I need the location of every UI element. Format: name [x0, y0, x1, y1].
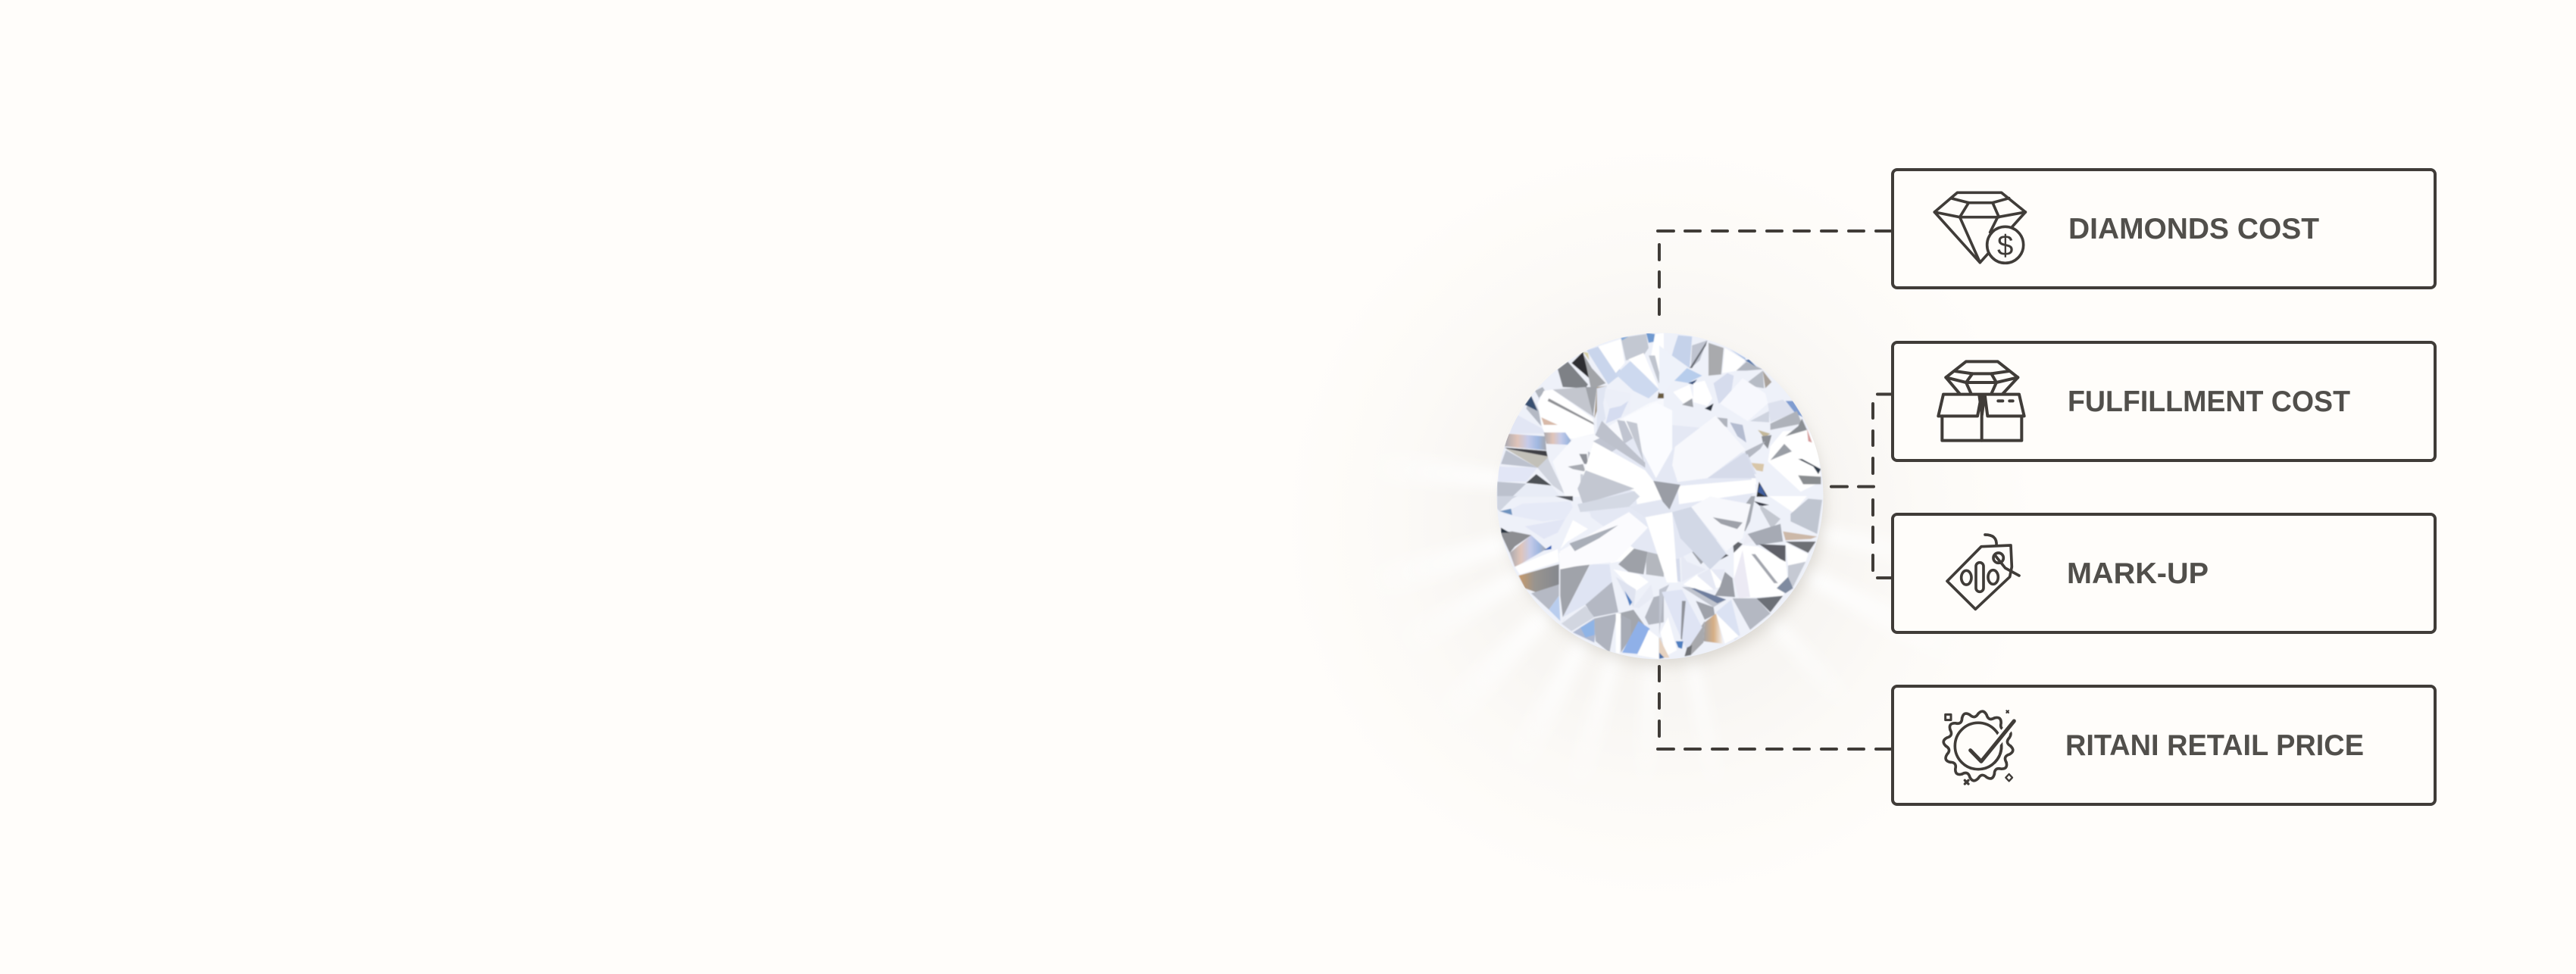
icon: diamond with dollar coin: [1934, 192, 2025, 263]
facets: top left quadrant: [1497, 332, 1664, 497]
icon: diamond with dollar coin: $: [1997, 229, 2013, 262]
facets: bottom right quadrant: [1659, 496, 1822, 659]
icon: quality badge with check mark: [1940, 708, 2016, 784]
connector: ritani retail price: [1658, 667, 1893, 749]
icon: price tag: [1947, 535, 2019, 609]
facets: central table star: [1560, 403, 1756, 582]
diamond: [1493, 326, 1830, 667]
diamond glow and light rays: [1281, 144, 2039, 901]
label: mark-up: MARK-UP: [2067, 557, 2209, 590]
label: diamonds cost: DIAMONDS COST: [2068, 213, 2319, 245]
label: fulfillment cost: FULFILLMENT COST: [2068, 386, 2350, 418]
facets: bottom left quadrant: [1497, 496, 1664, 659]
panel: fulfillment cost: [1893, 342, 2435, 460]
panel: diamonds cost: [1893, 170, 2435, 288]
panel: ritani retail price: [1893, 686, 2435, 804]
connector: fulfillment and mark-up: [1831, 394, 1893, 578]
panel: mark-up: [1893, 514, 2435, 632]
connector: diamonds cost: [1658, 231, 1893, 314]
icon: diamond in open box: [1938, 361, 2024, 441]
facets: top right quadrant: [1659, 336, 1821, 497]
label: ritani retail price: RITANI RETAIL PRICE: [2065, 729, 2364, 762]
